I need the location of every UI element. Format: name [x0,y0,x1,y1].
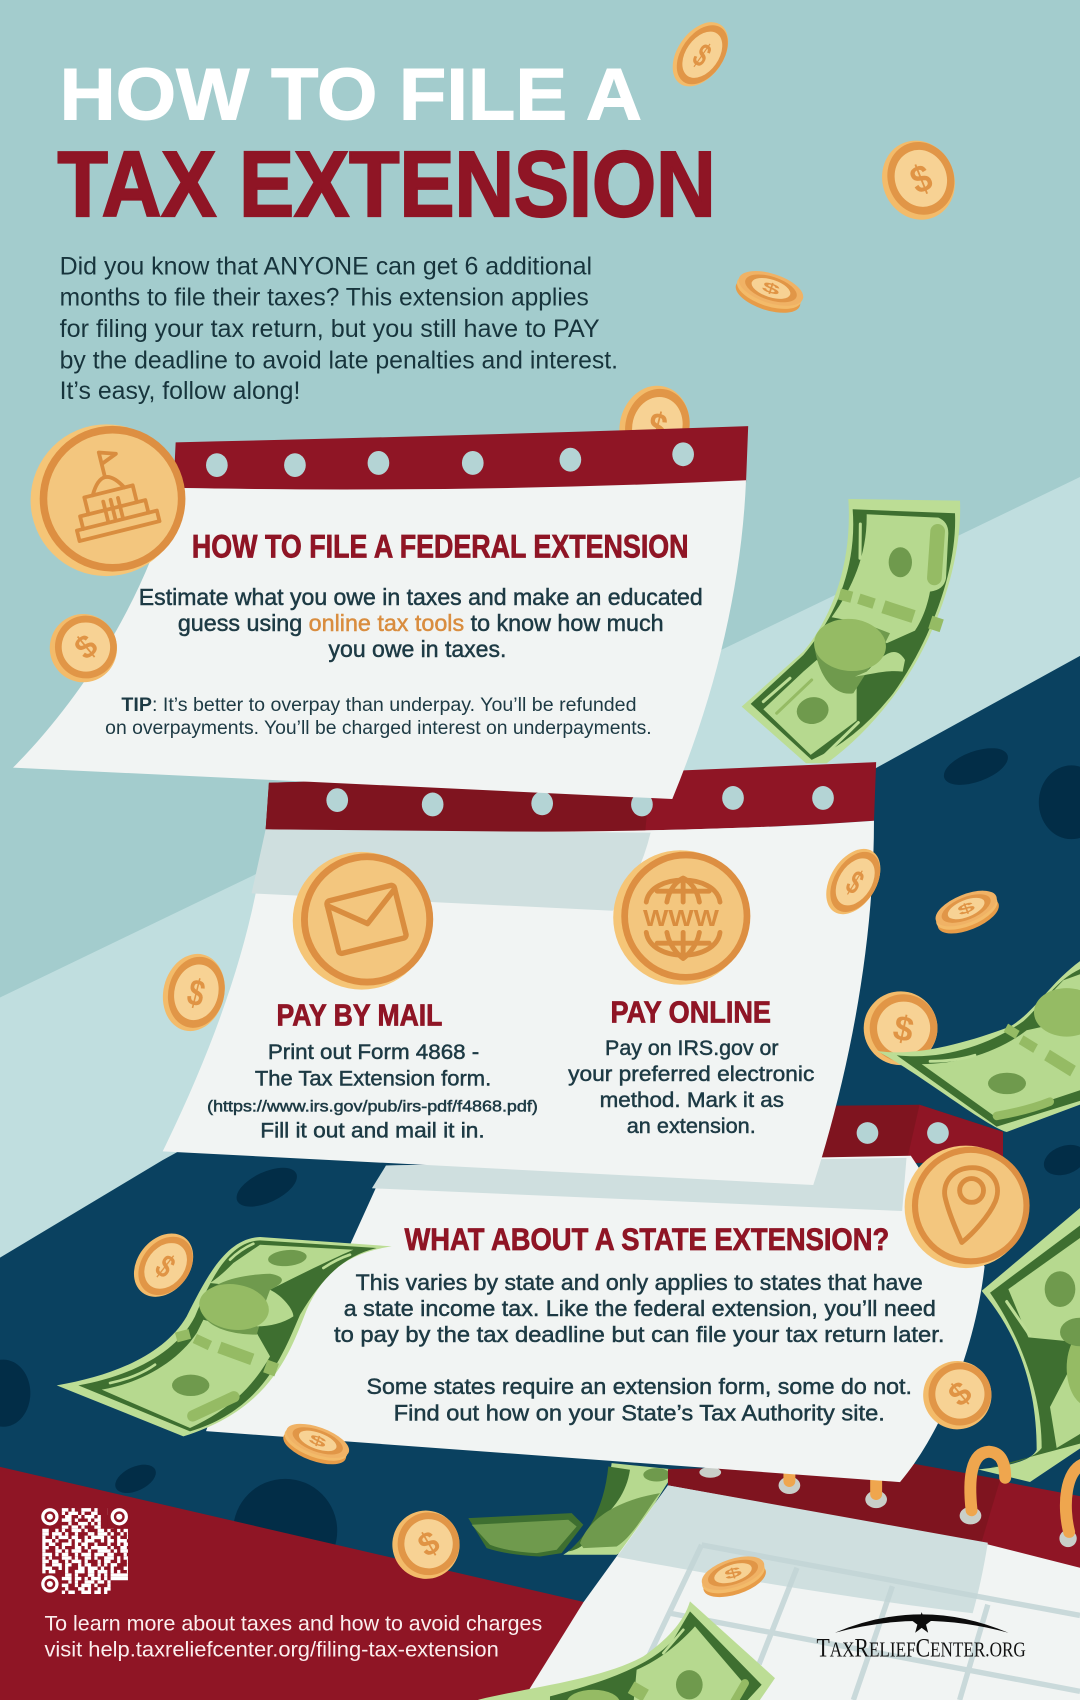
coin: above left bill: $ [148,1248,182,1286]
coin: right of state card: $ [941,1373,979,1413]
intro text: months to file their taxes? This extension applies [60,284,589,312]
coin: top: $ [686,37,717,75]
intro text [60,252,618,405]
calendar page shadow [617,1485,988,1613]
coin: behind federal card: $ [643,403,672,451]
heading: state extension: WHAT ABOUT A STATE EXTENSION? [404,1222,889,1257]
text: state extension body: This varies by state and only applies to states that have [356,1270,923,1295]
footer text: To learn more about taxes and how to avoid charges [44,1611,542,1636]
text: tip: on overpayments. You’ll be charged interest on underpayments. [105,717,652,739]
text: state extension body: to pay by the tax deadline but can file your tax return later. [334,1322,944,1347]
text: federal extension body [139,584,703,662]
coin: upper right [870,130,967,231]
coin: flat on navy [930,883,1004,941]
text: pay online: your preferred electronic [568,1061,815,1086]
coin: left of payment card: $ [183,972,209,1016]
background: navy diagonal panel [0,656,1080,1700]
bill: right [877,959,1080,1132]
heading: federal extension: HOW TO FILE A FEDERAL EXTENSION [192,528,689,564]
text: state extension body: Find out how on your State’s Tax Authority site. [394,1400,885,1425]
panel: payment options [163,821,874,1185]
text: federal extension body: guess using online tax tools to know how much [178,610,664,636]
text: federal extension body: Estimate what you owe in taxes and make an educated [139,584,703,610]
intro text: It’s easy, follow along! [60,377,300,405]
coin: footer center [389,1507,463,1582]
intro text: for filing your tax return, but you still have to PAY [60,315,600,343]
background: light diagonal band [0,477,1080,1355]
icon: www globe coin: WWW [643,905,720,931]
icon: capitol building coin [31,424,185,576]
logo: Tax Relief Center: TAXRELIEFCENTER.ORG [817,1634,1026,1663]
bill: behind state card [468,1463,677,1556]
text: pay online [568,1035,815,1138]
heading: pay by mail: PAY BY MAIL [277,1000,442,1033]
title: tax extension: TAX EXTENSION [57,132,716,236]
footer red panel [0,1467,586,1700]
bill: left [57,1237,392,1436]
QR finder patterns [43,1507,129,1591]
coin: flat below left bill: $ [307,1431,329,1451]
coin: footer center: $ [412,1523,446,1564]
intro text: by the deadline to avoid late penalties and interest. [60,347,618,375]
text: pay by mail [207,1039,538,1142]
footer text: visit help.taxreliefcenter.org/filing-tax-extension [44,1637,499,1662]
text: pay by mail: The Tax Extension form. [255,1065,491,1090]
title: how to file a: HOW TO FILE A [60,52,642,135]
coin: behind right bill: $ [890,1008,917,1050]
coin: right of payment card: $ [839,864,870,903]
coin: left of federal card [44,609,122,688]
text: state extension body: Some states require an extension form, some do not. [367,1374,912,1399]
QR code [42,1507,129,1592]
coin: flat right: $ [760,278,782,299]
panel: federal card band [173,426,748,490]
coin: right of state card [918,1356,997,1435]
text: pay by mail: Print out Form 4868 - [268,1039,479,1064]
coin: flat right [731,264,807,320]
coin: right of payment card [815,839,892,924]
icon: www globe coin [613,850,750,985]
calendar binding band [668,1464,1080,1570]
coin: calendar [697,1550,771,1604]
text: pay by mail: Fill it out and mail it in. [260,1117,485,1142]
logo: Tax Relief Center [817,1612,1026,1663]
coin: upper right: $ [904,155,938,202]
text: pay online: method. Mark it as [600,1087,784,1112]
coin: left of payment card [155,947,233,1038]
text: pay online: Pay on IRS.gov or [605,1035,779,1060]
panel: payment card band [266,762,876,833]
footer text [44,1611,542,1662]
calendar rings [789,1452,1080,1532]
coin: top [661,12,740,97]
coin: behind federal card [611,378,698,475]
panel: state card band [815,1105,1003,1165]
bill: bottom [478,1601,775,1700]
intro text: Did you know that ANYONE can get 6 additional [60,252,592,280]
text: pay by mail: (https://www.irs.gov/pub/irs-pdf/f4868.pdf) [207,1098,538,1115]
icon: map pin coin [905,1146,1030,1268]
bill: top right [742,499,960,763]
calendar page [523,1485,1080,1700]
text: pay online: an extension. [627,1113,756,1138]
text: tip [105,694,652,739]
heading: pay online: PAY ONLINE [610,996,771,1029]
icon: envelope coin [293,852,433,990]
coin: above left bill [122,1222,205,1309]
bill: lower right [978,1205,1080,1482]
text: federal extension body: you owe in taxes. [329,636,506,662]
panel: state extension [206,1156,985,1482]
calendar grid [640,1545,1080,1700]
text: state extension body: a state income tax. Like the federal extension, you’ll need [344,1296,936,1321]
calendar: bottom sheet [523,1452,1080,1700]
coin: calendar: $ [723,1563,744,1583]
coin: flat on navy: $ [955,898,978,919]
text: tip: TIP: It’s better to overpay than underpay. You’ll be refunded [121,694,637,716]
calendar ring holes [699,1467,1077,1547]
coin: flat below left bill [279,1417,353,1472]
panel: federal extension [13,480,746,799]
state card shadow [372,1158,907,1211]
coin: behind right bill [857,984,944,1072]
payment card shadow [252,829,651,911]
coin: left of federal card: $ [68,627,104,667]
text: state extension body [334,1270,944,1425]
